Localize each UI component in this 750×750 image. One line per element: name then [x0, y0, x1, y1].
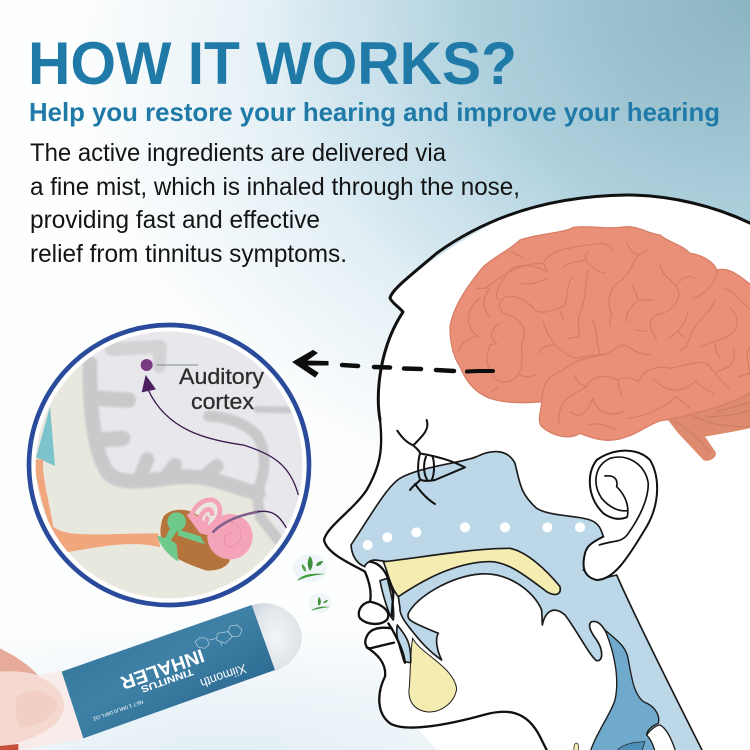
auditory pathway circle inset [27, 325, 317, 607]
lips and chin outline [324, 420, 547, 750]
finger knuckle [0, 648, 38, 676]
mist dots [363, 522, 585, 550]
tongue yellow [409, 638, 457, 712]
title: HOW IT WORKS? [28, 30, 517, 97]
body text: The active ingredients are delivered via [30, 139, 446, 167]
red sleeve corner [0, 744, 18, 750]
eye [397, 420, 465, 504]
body text [30, 139, 520, 268]
auditory cortex dot [141, 359, 153, 371]
brain [450, 227, 750, 461]
inhaler label text: INHALER [117, 644, 207, 693]
icon: small herb [309, 593, 331, 613]
semicircular canals [191, 500, 220, 531]
palate yellow [383, 548, 560, 597]
inhaler label [62, 605, 275, 738]
temporal bone [160, 510, 230, 571]
body text: a fine mist, which is inhaled through the nose, [30, 173, 520, 201]
molecule line art [195, 625, 242, 648]
cerebrum outline [450, 227, 750, 440]
brain folds [458, 242, 750, 430]
cochlea [187, 513, 253, 559]
neck cartilage [573, 725, 680, 750]
auditory nerve [213, 511, 286, 532]
inhaler product [0, 603, 302, 750]
face white fill [324, 420, 750, 750]
auditory cortex label: Auditory [179, 364, 264, 389]
cyan cavity [36, 407, 55, 466]
throat dark blue [587, 630, 659, 750]
nerve pathway arrow [142, 375, 298, 495]
ear canal [35, 459, 160, 552]
finger [0, 671, 64, 747]
inset beige tissue [36, 363, 282, 598]
face and nasal cavity diagram [324, 420, 750, 750]
ear [584, 451, 657, 580]
icon: large herb [293, 554, 327, 582]
inset ring [29, 325, 309, 605]
front teeth blue strips [380, 578, 411, 663]
inhaler label text: Xiimonth [198, 661, 248, 691]
auditory cortex label [179, 364, 264, 414]
body text: providing fast and effective [30, 206, 320, 234]
inhaler label text [92, 644, 248, 721]
inhaler label text: TINNITUS [139, 666, 195, 694]
inhaler base [18, 671, 84, 750]
inset cortex area [93, 332, 302, 535]
body text: relief from tinnitus symptoms. [30, 240, 347, 268]
cerebellum and brainstem [667, 390, 750, 461]
nasal airway blue area [351, 452, 710, 750]
fingertip shadow [16, 691, 57, 727]
auditory cortex label: cortex [191, 389, 254, 414]
herbal mist icons [293, 554, 331, 613]
inhaler label text: NET 1.0ML/0.08FL.OZ [92, 698, 144, 721]
dashed arrow from brain to auditory cortex [293, 350, 493, 377]
inhaler cap [252, 603, 302, 671]
subtitle: Help you restore your hearing and improve your hearing [29, 97, 720, 127]
gray matter folds [90, 347, 290, 540]
head top white fill and outline [377, 195, 750, 450]
eardrum and ossicles [157, 512, 204, 562]
pointer line [156, 364, 198, 366]
